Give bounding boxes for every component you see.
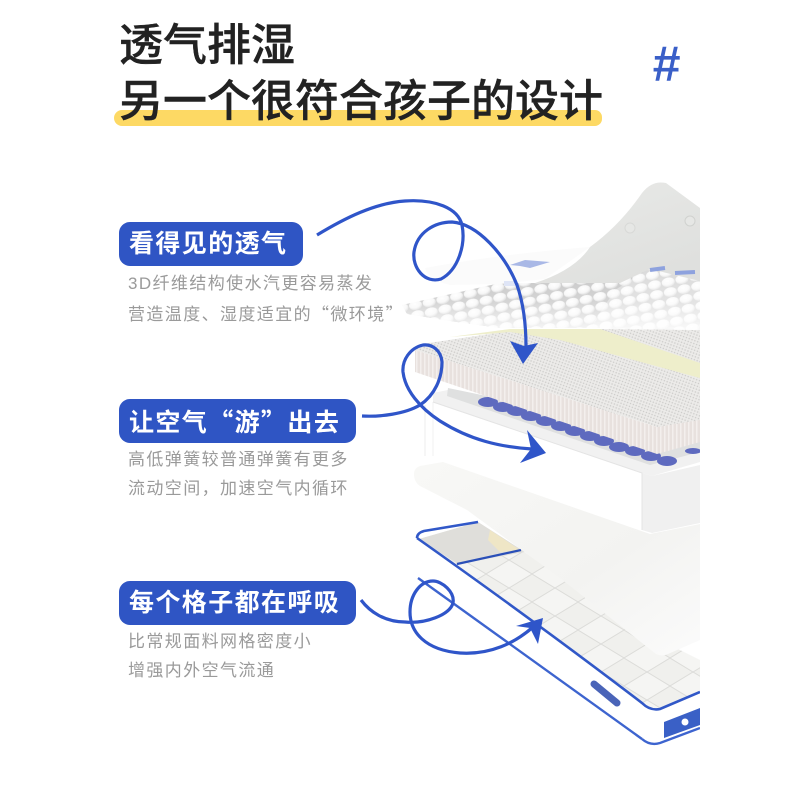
text block 1 (128, 274, 404, 325)
layer: top cover (500, 182, 700, 286)
heading pill 2: 让空气“游”出去 (129, 403, 340, 439)
layer: base mattress (417, 521, 700, 746)
arrow 2 (362, 345, 546, 463)
arrow 3 (361, 581, 543, 653)
layer: yellow latex (450, 329, 700, 378)
text block 3: 增强内外空气流通 (128, 661, 275, 680)
heading pill 1: 看得见的透气 (129, 230, 287, 258)
panel: every grid breathes (119, 581, 356, 680)
layer: 3D mesh fibre (415, 329, 700, 454)
title line 1: 透气排湿 (119, 21, 295, 70)
text block 1: 3D纤维结构使水汽更容易蒸发 (128, 274, 373, 293)
badge on base edge (594, 684, 617, 703)
text block 2 (128, 450, 349, 498)
arrow 1 (317, 201, 538, 364)
mattress exploded illustration (316, 182, 700, 746)
layer: thin foam (414, 462, 700, 656)
title highlight (114, 110, 602, 126)
text block 2: 流动空间，加速空气内循环 (128, 479, 349, 498)
text block 2: 高低弹簧较普通弹簧有更多 (128, 450, 349, 469)
panel: visible breathability (119, 222, 404, 325)
title line 2: 另一个很符合孩子的设计 (119, 77, 603, 126)
panel: let the air swim out (119, 399, 356, 498)
heading pill 3 (119, 581, 356, 625)
heading pill 1 (119, 222, 303, 266)
heading pill 3: 每个格子都在呼吸 (129, 589, 340, 617)
text block 3: 比常规面料网格密度小 (128, 632, 312, 651)
hash mark: # (652, 36, 680, 92)
blue springs (478, 397, 701, 466)
text block 3 (128, 632, 312, 680)
blue logo band (664, 708, 700, 738)
text block 1: 营造温度、湿度适宜的“微环境” (128, 300, 404, 325)
layer: egg-crate foam (402, 267, 700, 330)
layer: spring box (425, 388, 701, 533)
